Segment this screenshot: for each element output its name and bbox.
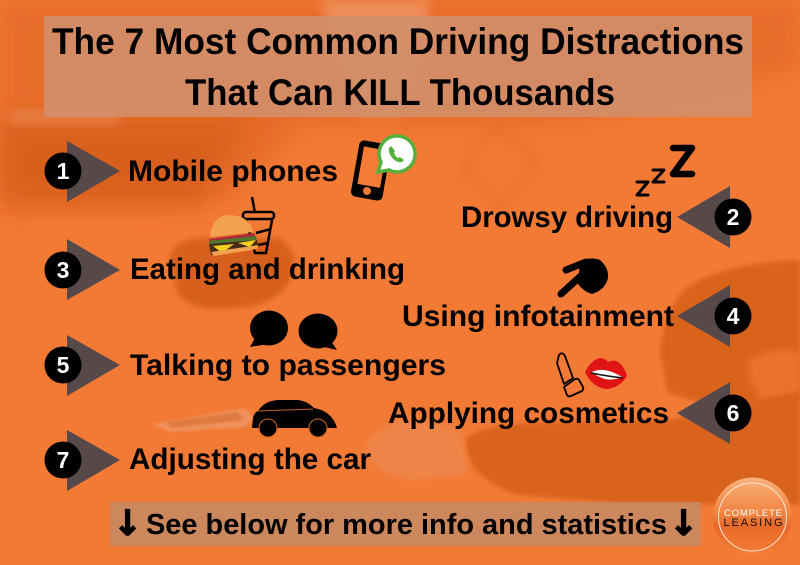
- item 3: eating and drinking: Eating and drinking: [130, 253, 405, 286]
- item 5: talking to passengers: 5: [57, 352, 70, 378]
- title text: That Can KILL Thousands: [185, 72, 615, 113]
- title text: The 7 Most Common Driving Distractions: [52, 21, 744, 62]
- icon: burger and drink: [209, 197, 274, 256]
- item 2: drowsy driving: 2: [727, 204, 739, 230]
- icon: lipstick and lips: [557, 353, 627, 396]
- item 5: talking to passengers: [44, 310, 446, 396]
- item 7: adjusting the car: 7: [57, 447, 69, 473]
- arm: [465, 392, 800, 505]
- head: [660, 260, 800, 405]
- item 3: eating and drinking: [44, 197, 405, 300]
- icon: speech bubbles: [250, 310, 338, 350]
- item 6: applying cosmetics: Applying cosmetics: [388, 397, 669, 430]
- item 1: mobile phones: Mobile phones: [128, 155, 338, 188]
- footer text: See below for more info and statistics: [146, 509, 667, 541]
- icon: car silhouette: [252, 400, 337, 437]
- title band: [44, 16, 752, 117]
- item 1: mobile phones: [44, 136, 415, 202]
- item 4: using infotainment: Using infotainment: [402, 300, 674, 333]
- icon: phone with chat badge: [350, 136, 415, 201]
- item 5: talking to passengers: Talking to passengers: [130, 349, 446, 382]
- logo: Complete Leasing: COMPLETE: [724, 508, 782, 519]
- item 7: adjusting the car: Adjusting the car: [129, 443, 371, 476]
- footer band: [110, 502, 701, 546]
- title text: [52, 21, 744, 113]
- icon: sleeping Zs: [637, 148, 692, 195]
- fallen phone: [153, 408, 254, 432]
- item 7: adjusting the car: [44, 400, 371, 491]
- item 4: using infotainment: 4: [727, 303, 740, 329]
- item 6: applying cosmetics: [388, 353, 752, 444]
- item 4: using infotainment: [402, 258, 752, 347]
- item 3: eating and drinking: 3: [57, 257, 69, 283]
- item 2: drowsy driving: Drowsy driving: [461, 201, 673, 234]
- logo: Complete Leasing: [713, 478, 792, 556]
- item 6: applying cosmetics: 6: [727, 400, 739, 426]
- hand: [365, 419, 467, 480]
- item 1: mobile phones: 1: [57, 158, 70, 184]
- footer text: ↓: [669, 504, 698, 544]
- footer text: ↓: [113, 504, 142, 544]
- icon: pointing hand: [561, 258, 608, 294]
- logo: Complete Leasing: LEASING: [724, 517, 782, 529]
- item 2: drowsy driving: [461, 148, 752, 248]
